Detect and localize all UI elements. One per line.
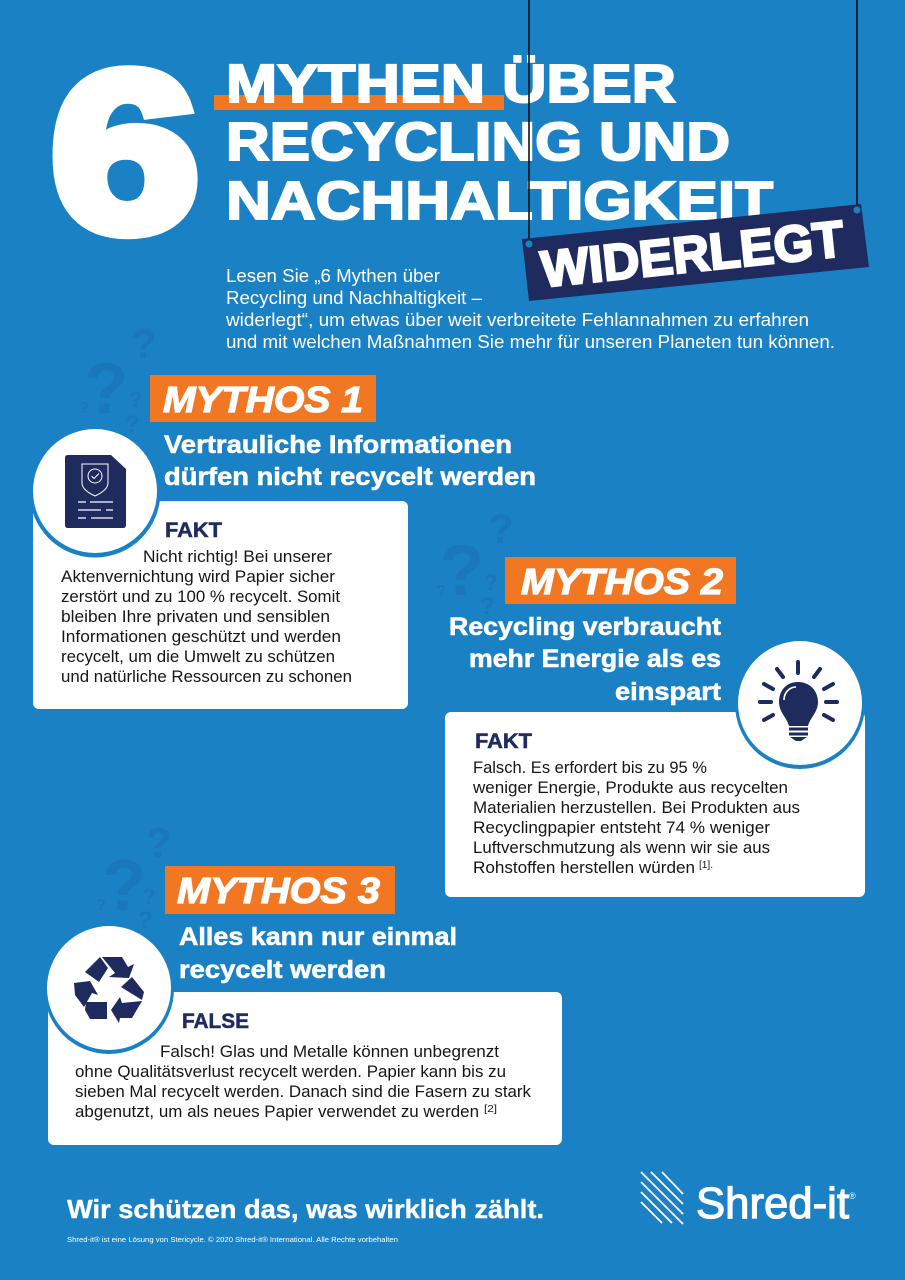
question marks: myth 2: ?	[436, 583, 446, 600]
myth 2 fact text: Luftverschmutzung als wenn wir sie aus	[473, 839, 770, 857]
myth 2 fact text	[472, 759, 800, 877]
myth 1 fact card	[33, 501, 408, 709]
question marks: myth 1: ?	[131, 320, 157, 367]
question marks: myth 1: ?	[84, 349, 128, 429]
question marks: myth 2: ?	[480, 593, 495, 620]
title: MYTHEN ÜBER	[226, 54, 676, 114]
myth 2 heading: Recycling verbraucht	[449, 613, 722, 641]
myth 3 fact text	[75, 1043, 532, 1121]
question marks: myth 2: ?	[484, 570, 497, 595]
footer tagline: Wir schützen das, was wirklich zählt.	[67, 1194, 544, 1224]
question marks: myth 3: ?	[138, 907, 153, 934]
myth 3 fact text: ohne Qualitätsverlust recycelt werden. Papier kann bis zu	[75, 1063, 506, 1081]
title: NACHHALTIGKEIT	[226, 171, 773, 231]
myth 1 fact text	[61, 548, 352, 686]
myth 3 heading: recycelt werden	[179, 956, 386, 984]
icon: secure document	[30, 426, 160, 558]
panel: myth 2	[445, 557, 865, 897]
icon: recycling arrows	[44, 924, 174, 1054]
myth 1 fact text: Aktenvernichtung wird Papier sicher	[61, 568, 336, 586]
panel: myth 3	[44, 866, 562, 1145]
myth 2 fact text: Rohstoffen herstellen würden	[473, 859, 695, 877]
myth 1 label: MYTHOS 1	[163, 379, 363, 420]
panel: myth 1	[30, 375, 536, 709]
myth 1 heading	[164, 431, 536, 491]
copyright note: Shred-it® ist eine Lösung von Stericycle. © 2020 Shred-it® International. Alle Rechte vorbehalten	[67, 1235, 398, 1244]
myth 2 fact text: Falsch. Es erfordert bis zu 95 %	[473, 759, 707, 777]
myth 3 fact text: [2]	[484, 1104, 497, 1115]
intro text: widerlegt“, um etwas über weit verbreitete Fehlannahmen zu erfahren	[225, 310, 809, 330]
question marks: myth 1: ?	[129, 387, 142, 412]
myth 2 heading: mehr Energie als es	[469, 645, 721, 673]
myth 2 heading	[449, 613, 722, 706]
question marks: myth 2	[436, 505, 514, 620]
intro text: und mit welchen Maßnahmen Sie mehr für unseren Planeten tun können.	[226, 332, 835, 352]
myth 3 fact text: abgenutzt, um als neues Papier verwendet zu werden	[75, 1103, 479, 1121]
highlight bar under MYTHEN	[214, 95, 504, 110]
myth 1 heading: dürfen nicht recycelt werden	[164, 463, 536, 491]
title	[214, 54, 773, 231]
logo: Shred-it: Shred-it	[696, 1179, 849, 1228]
myth 3 label: MYTHOS 3	[177, 870, 380, 911]
intro text: Lesen Sie „6 Mythen über	[226, 266, 440, 286]
title: RECYCLING UND	[226, 112, 730, 172]
myth 1 fact text: recycelt, um die Umwelt zu schützen	[61, 648, 335, 666]
hanging sign: widerlegt: WIDERLEGT	[538, 210, 847, 298]
myth 3 heading: Alles kann nur einmal	[179, 923, 457, 951]
myth 3 heading	[179, 923, 457, 984]
myth 2 fact card	[445, 712, 865, 897]
myth 1 fact text: zerstört und zu 100 % recycelt. Somit	[61, 588, 340, 606]
myth 3 fact text: Falsch! Glas und Metalle können unbegrenzt	[160, 1043, 499, 1061]
logo: Shred-it	[641, 1172, 856, 1228]
question marks: myth 2: ?	[488, 505, 514, 552]
question marks: myth 1: ?	[125, 411, 140, 438]
myth 2 label: MYTHOS 2	[521, 561, 723, 602]
question marks: myth 3: ?	[146, 819, 172, 866]
myth 2 fact label: FAKT	[475, 730, 532, 753]
myth 2 label	[505, 557, 736, 604]
question marks: myth 1: ?	[79, 400, 89, 417]
myth 3 label	[165, 866, 395, 914]
question marks: myth 1	[79, 320, 157, 438]
icon: light bulb	[735, 639, 865, 769]
myth 3 fact text: sieben Mal recycelt werden. Danach sind die Fasern zu stark	[75, 1083, 532, 1101]
intro text: Recycling und Nachhaltigkeit –	[226, 288, 482, 308]
myth 1 fact text: Nicht richtig! Bei unserer	[143, 548, 333, 566]
myth 2 fact text: weniger Energie, Produkte aus recycelten	[472, 779, 788, 797]
intro text	[225, 266, 835, 352]
hanging sign: widerlegt	[522, 0, 869, 301]
question marks: myth 3: ?	[142, 884, 155, 909]
question marks: myth 3: ?	[102, 846, 146, 926]
myth 3 fact card	[48, 992, 562, 1145]
myth 3 fact label: FALSE	[182, 1010, 249, 1033]
myth 2 fact text: Recyclingpapier entsteht 74 % weniger	[473, 819, 771, 837]
myth 1 heading: Vertrauliche Informationen	[164, 431, 512, 459]
myth 1 fact text: Informationen geschützt und werden	[61, 628, 341, 646]
myth 1 fact text: bleiben Ihre privaten und sensiblen	[61, 608, 330, 626]
myth 2 fact text: Materialien herzustellen. Bei Produkten aus	[473, 799, 800, 817]
myth 1 fact label: FAKT	[165, 519, 222, 542]
myth 2 fact text: [1].	[699, 860, 713, 871]
myth 2 heading: einspart	[615, 678, 722, 706]
big number 6: 6	[51, 25, 199, 278]
question marks: myth 3: ?	[96, 897, 106, 914]
logo: Shred-it: ®	[849, 1191, 856, 1201]
question marks: myth 2: ?	[440, 531, 484, 611]
myth 1 fact text: und natürliche Ressourcen zu schonen	[61, 668, 352, 686]
question marks: myth 3	[96, 819, 172, 934]
